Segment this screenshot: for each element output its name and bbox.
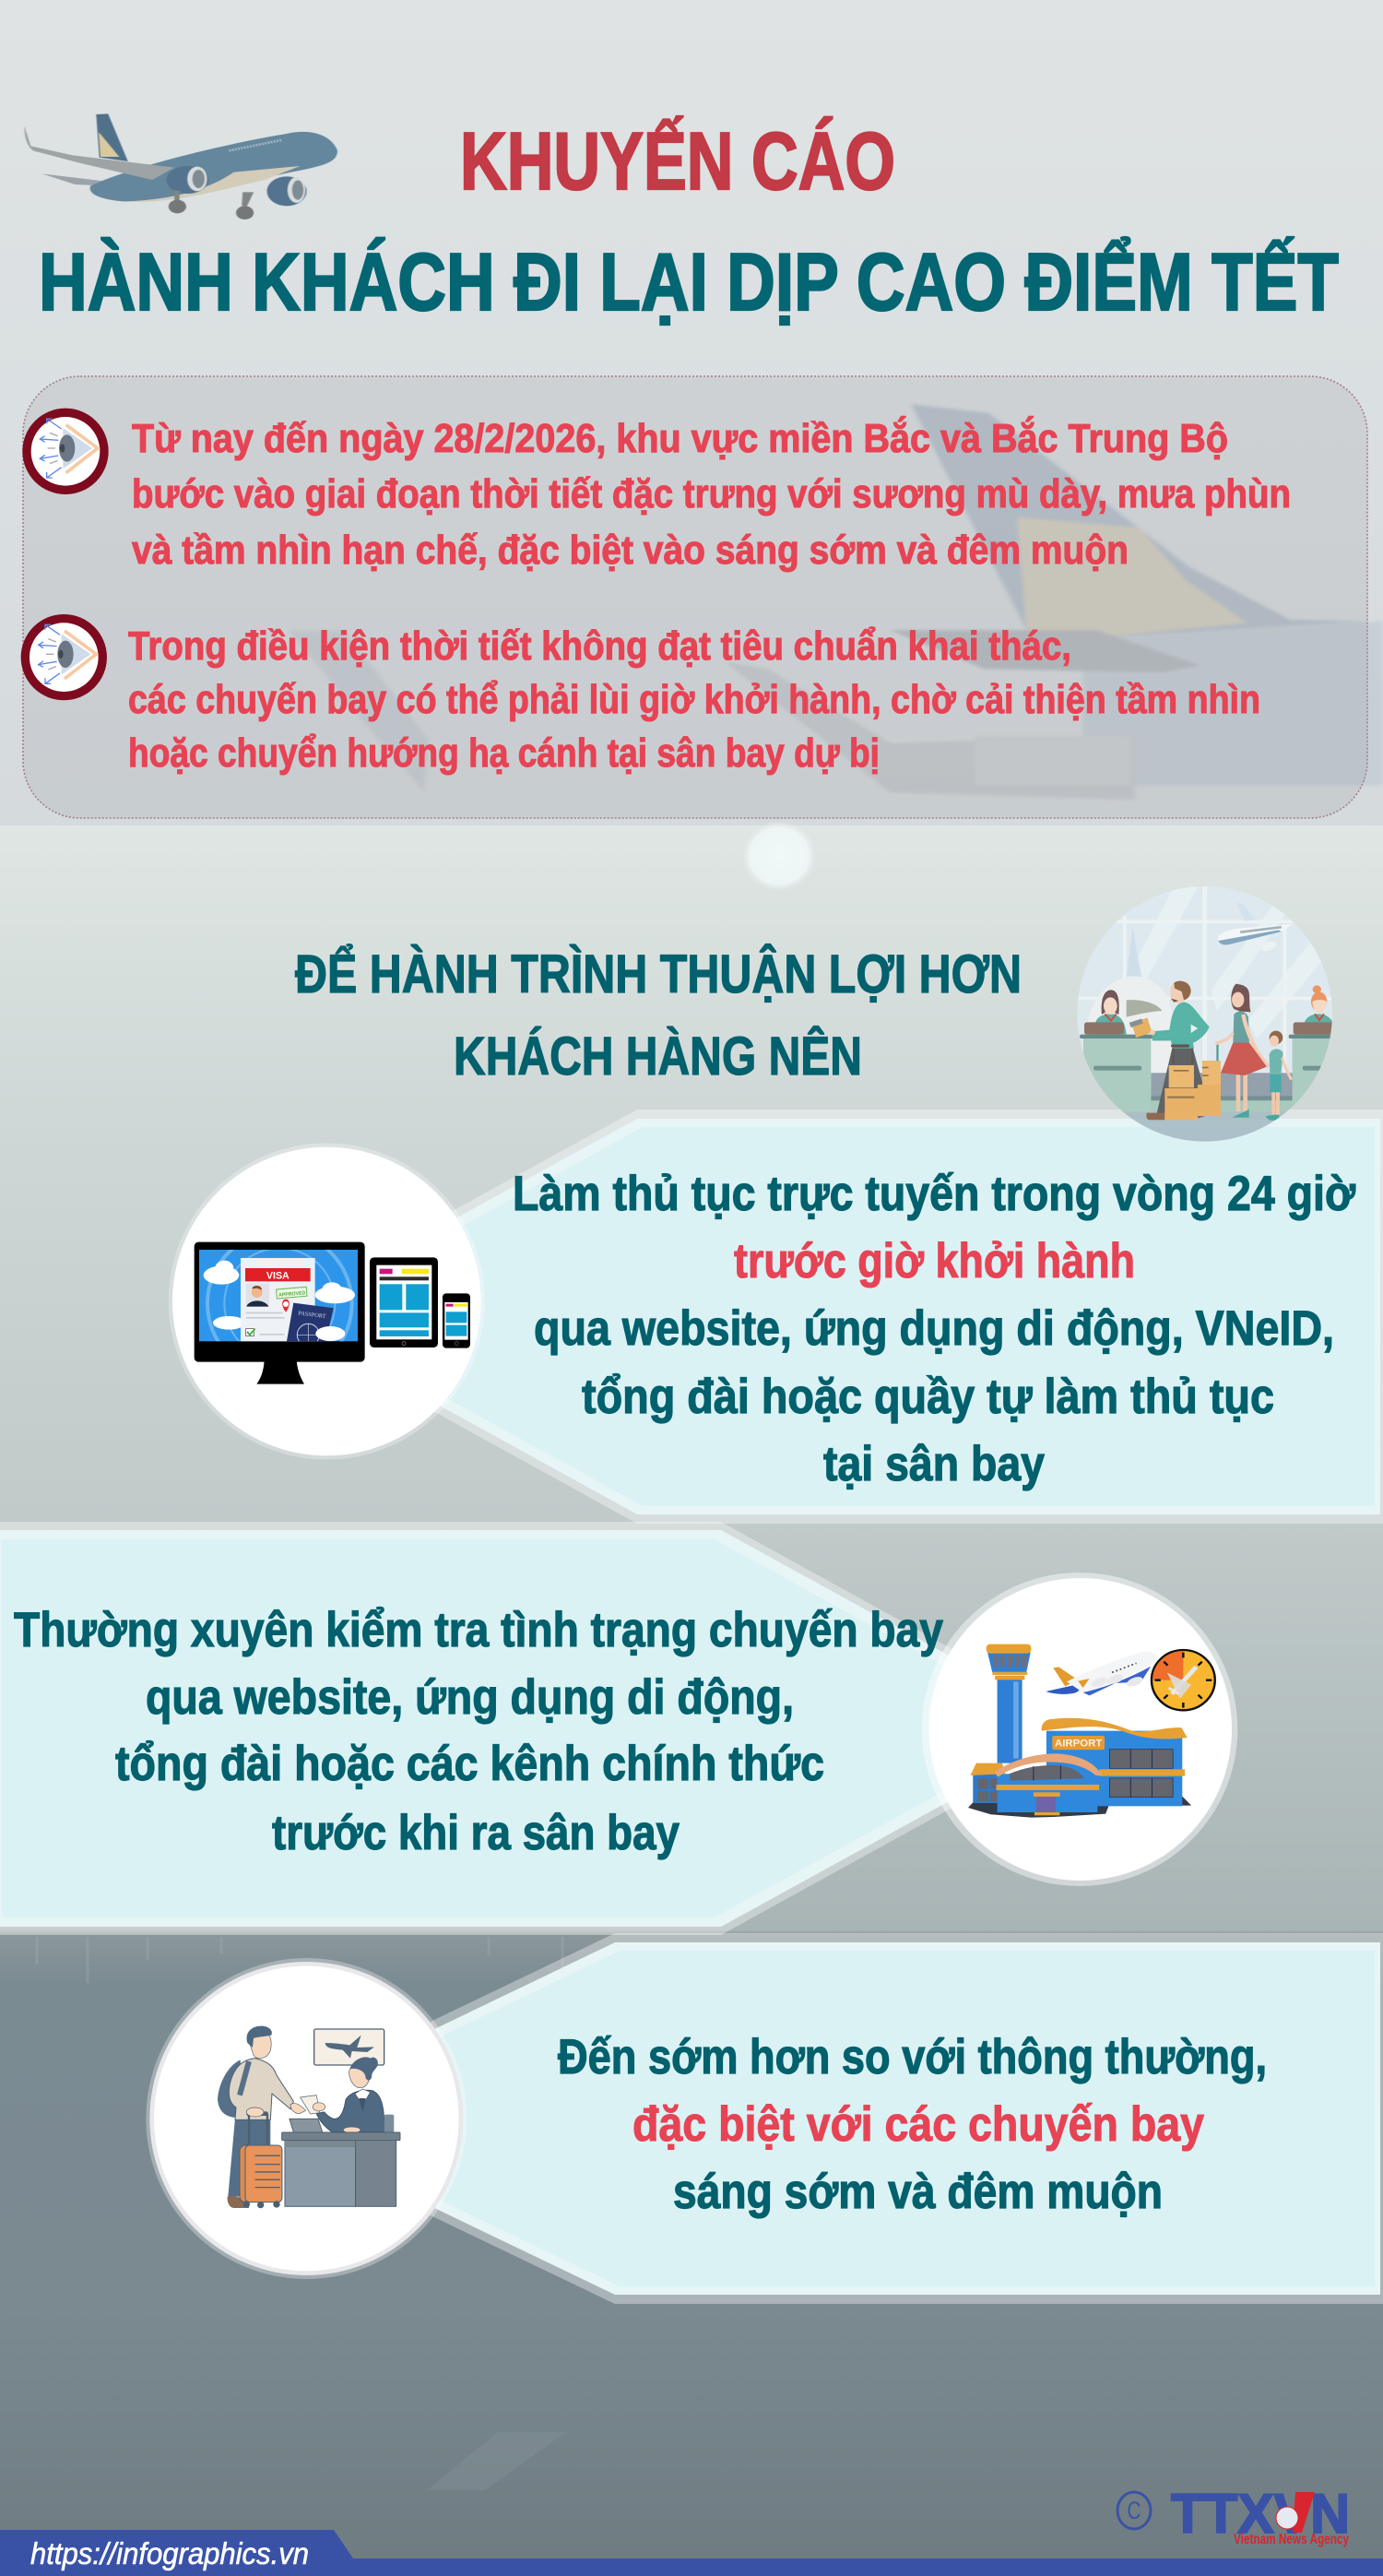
- agent: [301, 2057, 394, 2133]
- fuselage: [90, 132, 337, 202]
- phone: [443, 1293, 470, 1348]
- woman: [1236, 1073, 1240, 1111]
- clock: [1152, 1650, 1215, 1710]
- text block: warning 2: Trong điều kiện thời tiết không đạt tiêu chuẩn khai thác,: [128, 623, 1071, 669]
- monitor: APPROVED: [278, 1290, 306, 1299]
- child: [1271, 1091, 1275, 1114]
- plane outside window: [1218, 902, 1293, 953]
- text block: flight status advice: Thường xuyên kiểm tra tình trạng chuyến bay: [14, 1603, 943, 1657]
- rear stabilizer: [41, 173, 108, 186]
- heading: advice for passengers: [295, 944, 1022, 1086]
- monitor: [195, 1231, 365, 1384]
- terminal building: [968, 1718, 1191, 1818]
- man: [218, 2026, 306, 2208]
- man at counter: [1156, 1048, 1202, 1118]
- footer bar with website: https://infographics.vn: [30, 2536, 309, 2570]
- panel: check flight status: [0, 1522, 1096, 1935]
- title line 1: KHUYẾN CÁO: [460, 115, 895, 207]
- title: [39, 115, 1339, 327]
- text block: check-in advice: [513, 1167, 1355, 1491]
- heading: advice for passengers: KHÁCH HÀNG NÊN: [454, 1027, 862, 1086]
- text block: warning 1: và tầm nhìn hạn chế, đặc biệt vào sáng sớm và đêm muộn: [132, 528, 1129, 573]
- text block: flight status advice: qua website, ứng dụng di động,: [146, 1670, 794, 1725]
- desk: [282, 2119, 400, 2206]
- icon: eye with limited visibility 2: [21, 614, 107, 700]
- winglet and wing: [24, 126, 174, 180]
- photo: aircraft tail in fog: [288, 404, 1383, 800]
- left agent and counter: [1095, 1014, 1127, 1035]
- icon: check-in devices circle: [169, 1143, 485, 1460]
- icon: eye with limited visibility 1: [22, 409, 109, 494]
- text block: warning 1: [132, 415, 1291, 573]
- icon: passenger at counter circle: [146, 1958, 467, 2279]
- landing gear: [174, 191, 180, 203]
- photo: airplane flying in fog: [24, 113, 337, 220]
- heading: advice for passengers: ĐỂ HÀNH TRÌNH THUẬN LỢI HƠN: [295, 944, 1022, 1004]
- text block: warning 2: hoặc chuyển hướng hạ cánh tại sân bay dự bị: [128, 730, 880, 776]
- text block: flight status advice: trước khi ra sân bay: [272, 1806, 680, 1860]
- monitor: VISA: [266, 1271, 290, 1282]
- text block: arrive early advice: Đến sớm hơn so với thông thường,: [558, 2030, 1267, 2084]
- text block: warning 2: [128, 623, 1260, 776]
- engines: [166, 166, 208, 194]
- text block: flight status advice: tổng đài hoặc các kênh chính thức: [115, 1737, 824, 1791]
- text block: check-in advice: tổng đài hoặc quầy tự làm thủ tục: [582, 1370, 1274, 1424]
- terminal building: AIRPORT: [1055, 1738, 1102, 1750]
- right agent and counter: [1305, 1014, 1332, 1023]
- tail fin: [96, 113, 128, 161]
- monitor: PASSPORT: [298, 1310, 326, 1320]
- panel: online check-in: [261, 1110, 1383, 1524]
- tablet: [370, 1257, 438, 1347]
- control tower: [987, 1644, 1031, 1763]
- text block: warning 1: Từ nay đến ngày 28/2/2026, khu vực miền Bắc và Bắc Trung Bộ: [132, 415, 1228, 461]
- logo: TTXVN copyright: TTXVN: [1171, 2483, 1350, 2545]
- footer bar with website: [0, 2530, 1383, 2576]
- suitcase: [240, 2107, 282, 2208]
- text block: check-in advice: trước giờ khởi hành: [734, 1234, 1135, 1288]
- logo: TTXVN copyright: C: [1127, 2497, 1141, 2524]
- text block: arrive early advice: đặc biệt với các chuyến bay: [632, 2097, 1204, 2152]
- text block: flight status advice: [14, 1603, 943, 1860]
- text block: arrive early advice: [558, 2030, 1267, 2219]
- icon: airport check-in counter illustration: [1076, 885, 1336, 1146]
- icon: airport terminal circle: [922, 1573, 1237, 1886]
- text block: check-in advice: tại sân bay: [823, 1437, 1045, 1491]
- text block: arrive early advice: sáng sớm và đêm muộn: [673, 2165, 1163, 2219]
- boxes: [1169, 1065, 1194, 1087]
- departure sign: [314, 2029, 384, 2065]
- panel: arrive early: [229, 1933, 1383, 2304]
- panel: weather warning: [21, 376, 1367, 818]
- departing plane: [1046, 1652, 1157, 1695]
